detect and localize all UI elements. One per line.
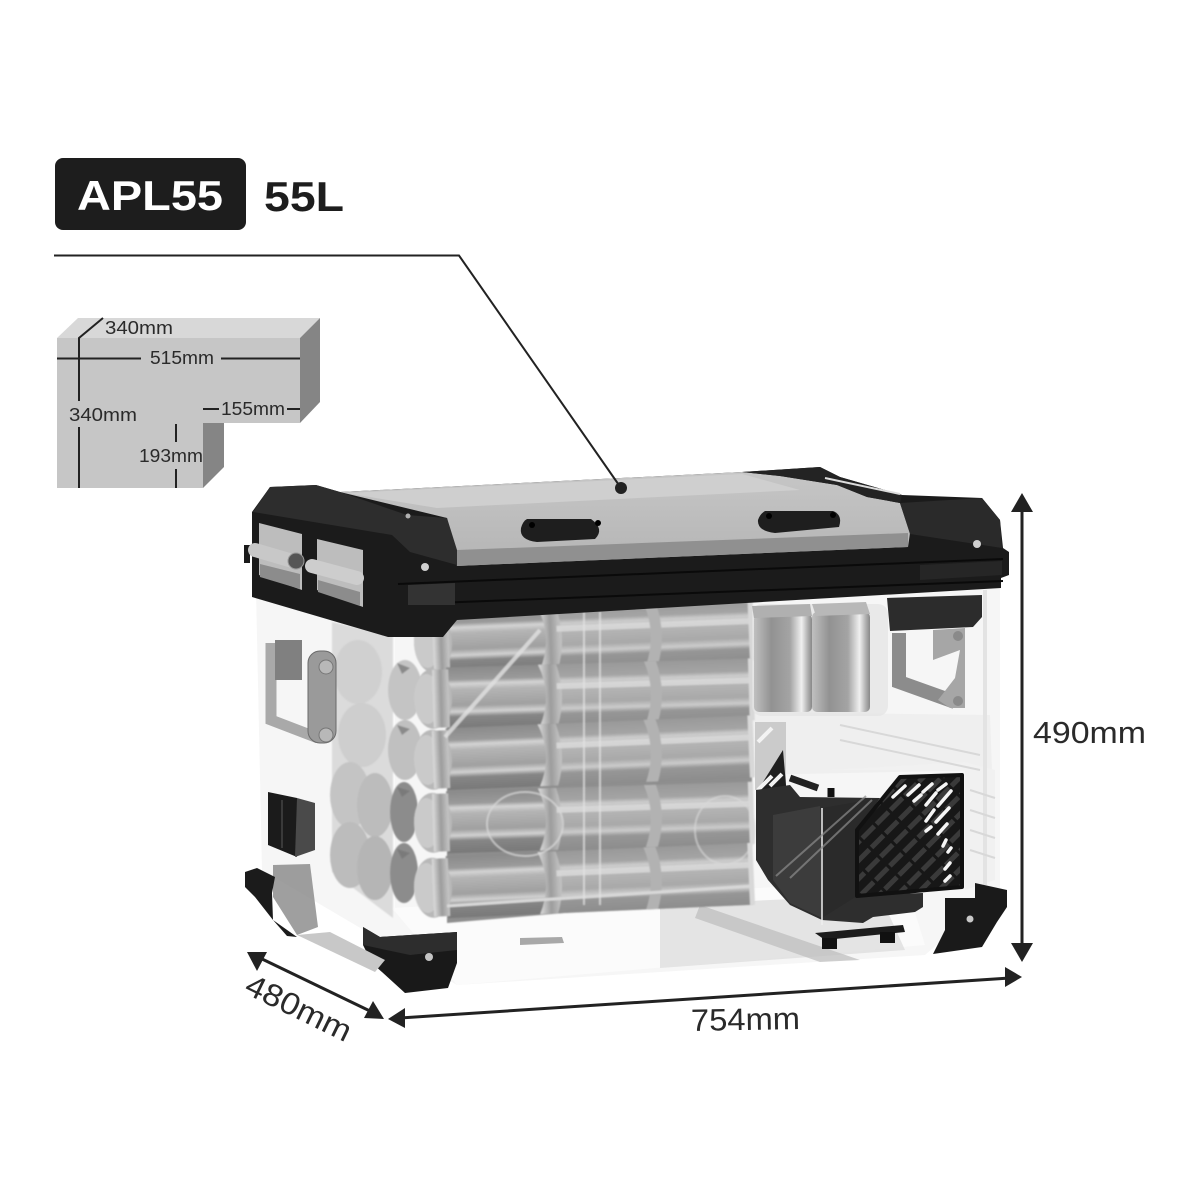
front side handle bbox=[271, 640, 336, 743]
width label: 754mm bbox=[691, 1001, 800, 1038]
internal capacity L-shaped diagram bbox=[57, 318, 320, 488]
capacity label: 55L bbox=[264, 173, 344, 220]
front left corner foot bbox=[363, 927, 457, 993]
internal capacity L-shaped diagram: 340mm bbox=[105, 318, 173, 338]
rear carry handle bbox=[899, 628, 965, 708]
upright cans bbox=[752, 602, 888, 716]
latch left bbox=[244, 523, 304, 590]
lid black shell bbox=[252, 467, 1009, 637]
dimension arrow: width bbox=[388, 967, 1022, 1028]
internal capacity L-shaped diagram: 193mm bbox=[139, 446, 203, 466]
internal capacity L-shaped diagram: 340mm bbox=[69, 405, 137, 425]
fan grille bbox=[857, 775, 962, 896]
depth label: 480mm bbox=[240, 967, 358, 1049]
rear right corner foot bbox=[933, 883, 1007, 954]
leader line to lid bbox=[54, 256, 627, 494]
dimension arrow: height bbox=[1011, 493, 1033, 962]
rear left corner foot bbox=[245, 864, 385, 972]
lid grip left bbox=[521, 519, 601, 542]
stacked cans rows bbox=[413, 599, 755, 923]
model badge bbox=[55, 158, 246, 230]
rocker switch bbox=[268, 792, 315, 857]
stacked side cans bbox=[330, 622, 422, 918]
lid grip right bbox=[758, 511, 840, 533]
cooler transparent body bbox=[256, 570, 1000, 985]
model badge: APL55 bbox=[77, 172, 223, 219]
dimension arrow: depth bbox=[247, 952, 384, 1019]
height label: 490mm bbox=[1033, 715, 1146, 750]
internal capacity L-shaped diagram: 155mm bbox=[221, 399, 285, 419]
compressor bbox=[756, 778, 923, 949]
rear vent grille bbox=[755, 722, 786, 800]
internal capacity L-shaped diagram: 515mm bbox=[150, 348, 214, 368]
latch right bbox=[312, 539, 363, 607]
